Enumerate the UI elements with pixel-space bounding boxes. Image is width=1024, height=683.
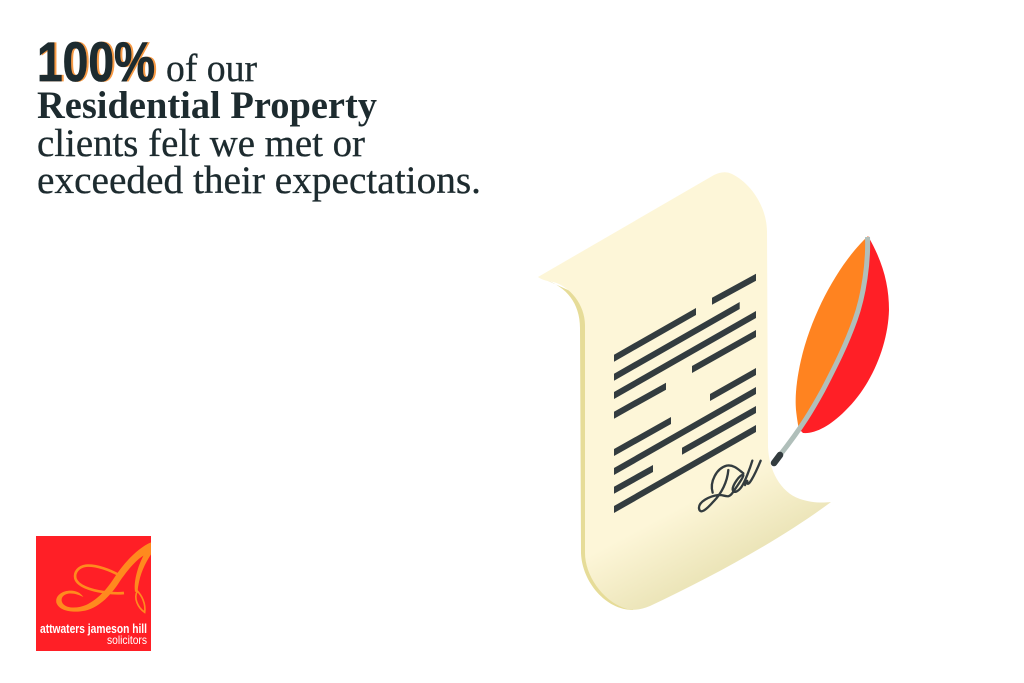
feather xyxy=(774,236,889,463)
logo solicitors text: solicitors xyxy=(107,633,147,647)
signature xyxy=(699,461,761,511)
text: Residential Property: Residential Property xyxy=(37,84,377,127)
logo background xyxy=(36,536,151,651)
illustration: signed document scroll xyxy=(538,172,889,610)
feather vane: red xyxy=(800,236,889,433)
pen nib xyxy=(774,455,780,463)
logo script letter A xyxy=(56,542,151,612)
text lines on document xyxy=(614,274,756,513)
logo: attwaters jameson hill solicitors xyxy=(36,536,151,651)
paper sheet xyxy=(538,172,831,610)
logo name text: attwaters jameson hill xyxy=(40,622,147,636)
big figure: 100% with orange offset: 100% xyxy=(37,30,155,93)
heading: satisfaction statement xyxy=(37,30,481,202)
paper shadow edge xyxy=(546,280,640,610)
text: of our: of our xyxy=(166,47,257,90)
feather vane: orange xyxy=(796,236,868,430)
feather shaft xyxy=(780,237,868,455)
text: clients felt we met or: clients felt we met or xyxy=(37,122,365,165)
big figure: 100% with orange offset: 100% xyxy=(39,30,157,93)
text: exceeded their expectations.: exceeded their expectations. xyxy=(37,159,481,202)
